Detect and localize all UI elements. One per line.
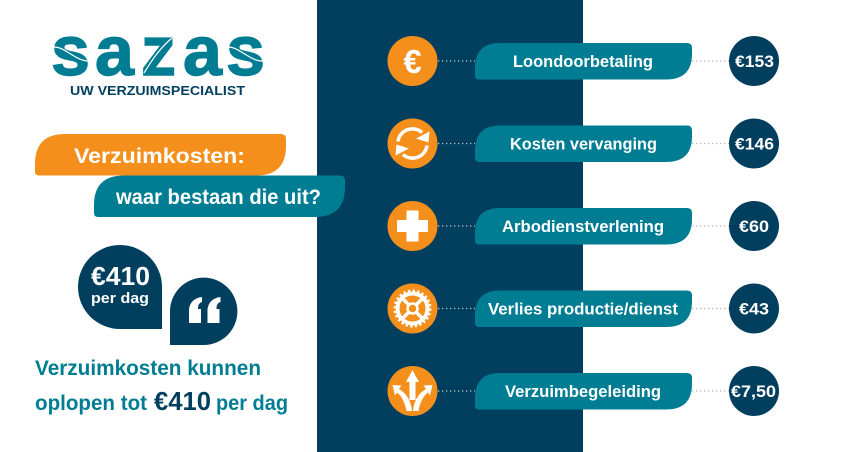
- value: €146: €146: [735, 134, 774, 154]
- value: €7,50: €7,50: [731, 382, 776, 401]
- icon: euro: [388, 36, 438, 86]
- value: €153: [729, 36, 779, 86]
- speech bubble: €410 per dag: [78, 245, 162, 329]
- value: €7,50: [729, 366, 779, 416]
- label pill: Verzuimbegeleiding: Verzuimbegeleiding: [505, 382, 661, 401]
- label pill: Kosten vervanging: Kosten vervanging: [510, 134, 657, 154]
- row: Verlies productie/dienst: [388, 284, 779, 334]
- label pill: Loondoorbetaling: [475, 43, 692, 80]
- label pill: Verlies productie/dienst: [475, 290, 692, 327]
- speech bubble: €410 per dag: per dag: [91, 290, 149, 307]
- value: €146: [729, 118, 779, 168]
- value: €153: €153: [735, 52, 774, 71]
- label pill: Verzuimbegeleiding: [475, 373, 692, 410]
- value: €43: €43: [739, 300, 769, 318]
- text block: Verzuimkosten kunnen oplopen tot €410 per dag: oplopen tot: [35, 392, 147, 415]
- row: Kosten vervanging: [388, 118, 779, 168]
- speech bubble: €410 per dag: €410: [91, 261, 150, 291]
- value: €60: [729, 201, 779, 251]
- row: Arbodienstverlening: [388, 201, 779, 251]
- text block: Verzuimkosten kunnen oplopen tot €410 per dag: per dag: [216, 392, 288, 415]
- heading: orange bubble: [35, 134, 286, 176]
- icon: medical cross: [388, 201, 438, 251]
- icon: gear: [388, 284, 438, 334]
- logo: sazas: sazas: [51, 12, 265, 90]
- logo: sazas: UW VERZUIMSPECIALIST: [70, 84, 245, 98]
- text block: Verzuimkosten kunnen oplopen tot €410 per dag: Verzuimkosten kunnen: [35, 357, 261, 380]
- label pill: Arbodienstverlening: [475, 208, 692, 244]
- value: €60: €60: [739, 217, 769, 236]
- heading: teal bubble: waar bestaan die uit?: [115, 186, 321, 209]
- heading: teal bubble: [94, 176, 345, 217]
- value: €43: [729, 284, 779, 334]
- label pill: Verlies productie/dienst: Verlies productie/dienst: [488, 300, 678, 318]
- row: Verzuimbegeleiding: [388, 366, 779, 416]
- label pill: Kosten vervanging: [475, 126, 692, 162]
- label pill: Arbodienstverlening: Arbodienstverlening: [502, 217, 664, 236]
- center navy panel: [317, 0, 583, 452]
- row: Loondoorbetaling: [388, 36, 779, 86]
- speech bubble: quote marks: [170, 278, 237, 345]
- heading: orange bubble: Verzuimkosten:: [74, 145, 245, 168]
- icon: three-way arrows: [388, 366, 438, 416]
- text block: Verzuimkosten kunnen oplopen tot €410 per dag: [35, 357, 288, 416]
- icon: euro: €: [403, 43, 422, 80]
- label pill: Loondoorbetaling: Loondoorbetaling: [513, 52, 653, 71]
- icon: refresh arrows: [388, 118, 438, 168]
- text block: Verzuimkosten kunnen oplopen tot €410 per dag: €410: [154, 386, 211, 416]
